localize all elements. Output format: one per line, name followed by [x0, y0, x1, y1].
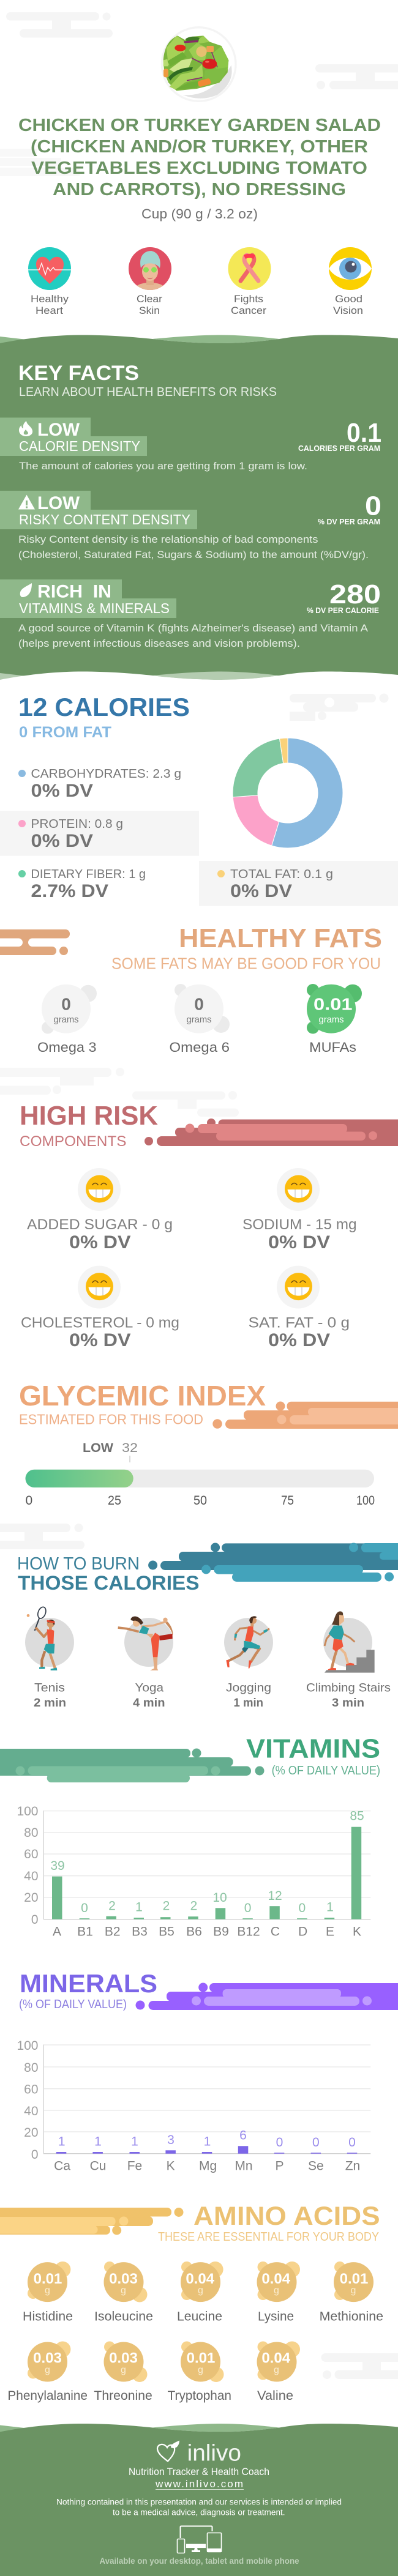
decorative blob: left of high risk: [0, 1068, 239, 1117]
amino: histidine: [23, 2261, 73, 2324]
activity: yoga: [118, 1617, 173, 1670]
amino: phenylalanine: g: [45, 2365, 50, 2375]
amino: threonine: g: [121, 2365, 126, 2375]
chart: minerals bar chart: Mg: [199, 2159, 217, 2173]
amino: tryptophan: 0.01: [187, 2350, 215, 2367]
stat: omega 3: 0: [61, 994, 71, 1013]
chart: minerals bar chart: Cu: [90, 2159, 106, 2173]
fact: calorie density: [0, 417, 381, 472]
chart: vitamins bar chart: 2: [108, 1899, 116, 1913]
legend: protein: [0, 811, 199, 856]
fact: rich in vitamins and minerals: (helps prevent infectious diseases and vision problems).: [18, 638, 300, 649]
activity label: climbing stairs: 3 min: [332, 1697, 364, 1710]
chart: vitamins bar chart: B3: [132, 1924, 148, 1938]
risk item: saturated fat: SAT. FAT - 0 g: [249, 1315, 350, 1331]
title: [18, 116, 381, 199]
chart: vitamins bar chart: 10: [212, 1891, 227, 1905]
risk item: added sugar: [27, 1168, 173, 1253]
chart: vitamins bar chart: 12: [268, 1889, 282, 1903]
website: www.inlivo.com: [155, 2478, 243, 2490]
stat: mufas: 0.01: [314, 994, 353, 1013]
decorative background blob: behind title: [0, 149, 80, 176]
chart: minerals bar chart: 1: [58, 2135, 66, 2149]
fact: calorie density: 0.1: [347, 419, 381, 448]
amino: phenylalanine: 0.03: [33, 2350, 62, 2367]
fact: risky content density: LOW: [37, 493, 80, 513]
chart: vitamins bar chart: 0: [299, 1901, 306, 1915]
amino: histidine: 0.01: [34, 2271, 62, 2287]
heading: vitamins: VITAMINS: [246, 1735, 380, 1764]
stat: omega 6: [169, 984, 230, 1055]
chart: vitamins bar chart: C: [271, 1924, 280, 1938]
amino: threonine: [94, 2341, 152, 2403]
activity: jogging: [224, 1616, 273, 1669]
label: good vision: Vision: [333, 305, 363, 316]
amino: isoleucine: Isoleucine: [94, 2310, 153, 2324]
risk item: added sugar: ADDED SUGAR - 0 g: [27, 1216, 173, 1233]
amino: methionine: Methionine: [320, 2310, 383, 2324]
chart: vitamins bar chart: 85: [350, 1809, 364, 1823]
stat: omega 3: Omega 3: [37, 1040, 97, 1055]
amino: valine: [257, 2341, 300, 2403]
tagline: Nutrition Tracker & Health Coach: [129, 2466, 269, 2477]
chart: minerals bar chart: 100: [17, 2039, 38, 2053]
chart: vitamins bar chart: B9: [213, 1924, 229, 1938]
panel: key facts: [0, 335, 398, 716]
chart: vitamins bar chart: 39: [50, 1859, 65, 1873]
subheading: amino acids: THESE ARE ESSENTIAL FOR YOUR BODY: [158, 2230, 379, 2244]
activity label: jogging: Jogging: [226, 1681, 271, 1695]
amino: lysine: 0.04: [261, 2271, 291, 2287]
fact: risky content density: Risky Content density is the relationship of bad components: [18, 534, 318, 545]
legend: dietary fiber: 2.7% DV: [31, 881, 108, 901]
disclaimer: to be a medical advice, diagnosis or treatment.: [113, 2507, 285, 2517]
chart: minerals bar chart: Ca: [54, 2159, 70, 2173]
chart: minerals bar chart: Se: [308, 2159, 324, 2173]
label: healthy heart: Heart: [36, 305, 63, 316]
chart: minerals bar chart: Fe: [127, 2159, 142, 2173]
chart: vitamins bar chart: [17, 1804, 370, 1938]
stat: omega 6: grams: [186, 1014, 212, 1025]
amino: isoleucine: [94, 2261, 153, 2324]
amino: methionine: [320, 2261, 383, 2324]
label: fights cancer: [231, 293, 266, 316]
title: AND CARROTS), NO DRESSING: [53, 180, 346, 199]
icon: good vision: [329, 247, 372, 290]
legend: total fat: 0% DV: [230, 881, 292, 901]
label: clear skin: [137, 293, 162, 316]
chart: minerals bar chart: 0: [276, 2135, 283, 2150]
chart: minerals bar chart: 20: [24, 2126, 38, 2140]
activity label: climbing stairs: [306, 1681, 391, 1710]
heading: healthy fats: HEALTHY FATS: [179, 924, 382, 953]
decorative blob: calories: [290, 694, 388, 721]
legend: protein: 0% DV: [31, 831, 93, 851]
subheading: key facts: LEARN ABOUT HEALTH BENEFITS OR RISKS: [19, 385, 277, 399]
serving size: Cup (90 g / 3.2 oz): [141, 206, 258, 221]
icon: salad bowl: [161, 26, 237, 102]
risk item: saturated fat: 0% DV: [268, 1330, 330, 1350]
header art: amino acids: [0, 2208, 184, 2235]
amino: leucine: g: [198, 2285, 203, 2296]
chart: vitamins bar chart: 2: [190, 1899, 197, 1913]
subheading: from fat: 0 FROM FAT: [19, 724, 111, 741]
chart: minerals bar chart: 0: [348, 2135, 356, 2150]
amino: histidine: Histidine: [23, 2310, 73, 2324]
stat: omega 6: 0: [194, 994, 204, 1013]
header art: high risk: [145, 1119, 398, 1146]
amino: threonine: Threonine: [94, 2389, 152, 2403]
title: VEGETABLES EXCLUDING TOMATO: [31, 158, 367, 178]
chart: vitamins bar chart: B12: [237, 1924, 260, 1938]
activity label: tennis: 2 min: [34, 1697, 66, 1710]
availability note: Available on your desktop, tablet and mobile phone: [99, 2556, 299, 2566]
stat: mufas: [307, 984, 362, 1055]
chart: minerals bar chart: [17, 2039, 370, 2173]
icon: flame: [19, 421, 32, 436]
amino: leucine: [177, 2261, 223, 2324]
heading: calories: 12 CALORIES: [18, 693, 190, 721]
chart: minerals bar chart: 1: [204, 2135, 211, 2149]
amino: lysine: Lysine: [258, 2310, 294, 2324]
heading: those calories: THOSE CALORIES: [18, 1572, 200, 1594]
amino: valine: 0.04: [261, 2350, 291, 2367]
label: good vision: [333, 293, 363, 316]
chart: glycemic index bar: 50: [193, 1494, 207, 1508]
decorative blob: burn calories: [0, 1524, 84, 1549]
chart: minerals bar chart: P: [275, 2159, 284, 2173]
chart: minerals bar chart: 1: [131, 2135, 138, 2149]
title: CHICKEN OR TURKEY GARDEN SALAD: [18, 116, 381, 135]
heading: key facts: KEY FACTS: [18, 362, 139, 385]
chart: vitamins bar chart: 80: [24, 1826, 38, 1840]
amino: phenylalanine: Phenylalanine: [7, 2389, 88, 2403]
fact: rich in vitamins and minerals: 280: [329, 580, 381, 609]
stat: omega 3: [37, 985, 97, 1055]
icon: healthy heart: [28, 247, 71, 290]
icon: inlivo logo: [157, 2440, 179, 2461]
amino: methionine: g: [351, 2285, 356, 2296]
chart: glycemic index bar: 75: [281, 1494, 294, 1508]
heading: amino acids: AMINO ACIDS: [193, 2202, 380, 2231]
fact: rich in vitamins and minerals: [0, 579, 381, 649]
fact: risky content density: (Cholesterol, Saturated Fat, Sugars & Sodium) to the amount (%DV/gr).: [18, 549, 369, 560]
chart: glycemic index bar: LOW: [83, 1441, 113, 1455]
chart: minerals bar chart: Zn: [345, 2159, 360, 2173]
subheading: healthy fats: SOME FATS MAY BE GOOD FOR YOU: [111, 955, 381, 973]
decorative background blob: top right: [315, 64, 398, 89]
label: clear skin: Skin: [139, 305, 160, 316]
legend: protein: PROTEIN: 0.8 g: [31, 817, 123, 831]
label: clear skin: Clear: [137, 293, 162, 305]
activity label: yoga: Yoga: [135, 1681, 163, 1695]
chart: vitamins bar chart: 0: [244, 1901, 251, 1915]
fact: calorie density: LOW: [37, 420, 80, 440]
chart: vitamins bar chart: 2: [163, 1899, 170, 1913]
risk item: added sugar: 0% DV: [69, 1232, 131, 1253]
activity: climbing stairs: [323, 1611, 375, 1673]
header art: burn calories: [148, 1543, 398, 1582]
activity label: tennis: Tenis: [34, 1681, 65, 1695]
icon: leaf: [20, 583, 32, 597]
amino: tryptophan: Tryptophan: [168, 2389, 231, 2403]
heading: glycemic index: GLYCEMIC INDEX: [19, 1380, 266, 1412]
chart: minerals bar chart: 0: [31, 2148, 38, 2162]
title: (CHICKEN AND/OR TURKEY, OTHER: [31, 137, 368, 157]
subheading: components: COMPONENTS: [20, 1133, 126, 1150]
chart: vitamins bar chart: B1: [77, 1924, 93, 1938]
heading: how to burn: HOW TO BURN: [17, 1554, 140, 1574]
stat: mufas: MUFAs: [309, 1040, 356, 1055]
label: healthy heart: Healthy: [31, 293, 69, 305]
amino: valine: Valine: [257, 2389, 293, 2403]
activity label: climbing stairs: Climbing Stairs: [306, 1681, 391, 1695]
chart: vitamins bar chart: 1: [135, 1900, 143, 1915]
stat: omega 3: grams: [54, 1014, 78, 1025]
chart: vitamins bar chart: B5: [159, 1924, 175, 1938]
activity label: yoga: [133, 1681, 165, 1710]
risk item: sodium: SODIUM - 15 mg: [242, 1216, 356, 1233]
activity label: jogging: 1 min: [234, 1697, 263, 1710]
amino: histidine: g: [45, 2285, 50, 2296]
icon: clear skin: [129, 247, 171, 291]
amino: lysine: [257, 2261, 300, 2324]
chart: minerals bar chart: 1: [94, 2135, 102, 2149]
fact: rich in vitamins and minerals: % DV PER CALORIE: [307, 606, 379, 615]
legend: dietary fiber: DIETARY FIBER: 1 g: [31, 867, 146, 881]
amino: leucine: Leucine: [177, 2310, 222, 2324]
risk item: cholesterol: 0% DV: [69, 1330, 131, 1350]
chart: vitamins bar chart: 20: [24, 1891, 38, 1905]
chart: vitamins bar chart: B6: [186, 1924, 202, 1938]
disclaimer: Nothing contained in this presentation and our services is intended or implied: [56, 2497, 342, 2506]
subheading: glycemic index: ESTIMATED FOR THIS FOOD: [19, 1412, 203, 1428]
panel: footer: [0, 2424, 398, 2576]
chart: minerals bar chart: 40: [24, 2104, 38, 2118]
amino: threonine: 0.03: [109, 2350, 138, 2367]
header art: minerals: [136, 1982, 398, 2010]
risk item: sodium: [242, 1168, 356, 1253]
chart: vitamins bar chart: 0: [81, 1901, 88, 1915]
amino: phenylalanine: [7, 2341, 88, 2403]
chart: minerals bar chart: 60: [24, 2083, 38, 2096]
activity: tennis: [25, 1606, 74, 1670]
risk item: saturated fat: [249, 1266, 350, 1350]
chart: minerals bar chart: 0: [312, 2135, 320, 2150]
fact: risky content density: RISKY CONTENT DENSITY: [19, 512, 190, 527]
disclaimer: [56, 2497, 342, 2517]
heading: high risk: HIGH RISK: [20, 1101, 159, 1131]
chart: vitamins bar chart: 60: [24, 1847, 38, 1861]
chart: minerals bar chart: 6: [239, 2129, 247, 2143]
stat: mufas: grams: [318, 1014, 344, 1025]
decorative blob: bottom right: [321, 2353, 398, 2379]
header art: healthy fats: [0, 929, 70, 955]
amino: lysine: g: [274, 2285, 279, 2296]
chart: calorie donut: [233, 738, 343, 848]
fact: calorie density: The amount of calories you are getting from 1 gram is low.: [19, 461, 307, 472]
fact: rich in vitamins and minerals: A good source of Vitamin K (fights Alzheimer's disease) and Vitamin A: [18, 623, 368, 634]
brand name: inlivo: [187, 2440, 241, 2466]
chart: minerals bar chart: 80: [24, 2061, 38, 2075]
legend: carbohydrates: [18, 767, 181, 801]
fact: calorie density: CALORIES PER GRAM: [298, 444, 380, 453]
activity label: tennis: [34, 1681, 66, 1710]
chart: vitamins bar chart: 1: [326, 1900, 334, 1915]
chart: vitamins bar chart: 100: [17, 1804, 38, 1818]
chart: vitamins bar chart: B2: [105, 1924, 121, 1938]
chart: glycemic index bar: 0: [26, 1494, 32, 1508]
chart: minerals bar chart: K: [167, 2159, 175, 2173]
header art: vitamins: [0, 1749, 265, 1782]
activity label: jogging: [226, 1681, 271, 1710]
chart: vitamins bar chart: 0: [31, 1913, 38, 1927]
fact: rich in vitamins and minerals: VITAMINS & MINERALS: [19, 600, 170, 616]
chart: glycemic index bar: [26, 1441, 375, 1508]
subheading: vitamins daily value: (% OF DAILY VALUE): [272, 1764, 380, 1778]
legend: dietary fiber: [18, 867, 146, 901]
chart: vitamins bar chart: A: [53, 1924, 61, 1938]
chart: vitamins bar chart: D: [298, 1924, 307, 1938]
chart: vitamins bar chart: E: [326, 1924, 334, 1938]
icon: devices: [178, 2526, 222, 2553]
amino: valine: g: [274, 2365, 279, 2375]
amino: isoleucine: g: [121, 2285, 126, 2296]
chart: minerals bar chart: Mn: [235, 2159, 253, 2173]
decorative background blob: top left: [6, 12, 113, 38]
risk item: cholesterol: [21, 1266, 179, 1350]
fact: risky content density: 0: [365, 492, 381, 521]
amino: tryptophan: g: [198, 2365, 203, 2375]
fact: risky content density: % DV PER GRAM: [318, 517, 380, 526]
label: fights cancer: Cancer: [231, 305, 266, 316]
legend: carbohydrates: CARBOHYDRATES: 2.3 g: [31, 767, 181, 781]
chart: glycemic index bar: 100: [356, 1494, 375, 1508]
label: fights cancer: Fights: [234, 293, 263, 305]
chart: vitamins bar chart: 40: [24, 1869, 38, 1883]
chart: glycemic index bar: 25: [108, 1494, 121, 1508]
legend: total fat: [199, 861, 398, 906]
amino: isoleucine: 0.03: [109, 2271, 138, 2287]
risk item: sodium: 0% DV: [268, 1232, 330, 1253]
fact: rich in vitamins and minerals: RICH IN: [37, 581, 111, 602]
activity label: yoga: 4 min: [133, 1697, 165, 1710]
fact: calorie density: CALORIE DENSITY: [19, 438, 140, 454]
amino: leucine: 0.04: [186, 2271, 215, 2287]
chart: minerals bar chart: 3: [167, 2133, 175, 2147]
amino: tryptophan: [168, 2341, 231, 2403]
legend: total fat: TOTAL FAT: 0.1 g: [230, 867, 333, 881]
amino: methionine: 0.01: [340, 2271, 368, 2287]
chart: vitamins bar chart: K: [353, 1924, 361, 1938]
label: healthy heart: [31, 293, 69, 316]
subheading: minerals daily value: (% OF DAILY VALUE): [19, 1998, 127, 2011]
stat: omega 6: Omega 6: [169, 1040, 230, 1055]
legend: carbohydrates: 0% DV: [31, 781, 93, 801]
label: good vision: Good: [335, 293, 362, 305]
icon: warning triangle: [18, 495, 35, 509]
icon: fights cancer ribbon: [228, 247, 271, 290]
header art: glycemic index: [212, 1401, 398, 1429]
risk item: cholesterol: CHOLESTEROL - 0 mg: [21, 1315, 179, 1331]
chart: glycemic index bar: 32: [122, 1441, 138, 1455]
heading: minerals: MINERALS: [20, 1969, 157, 1998]
fact: risky content density: [0, 491, 381, 560]
